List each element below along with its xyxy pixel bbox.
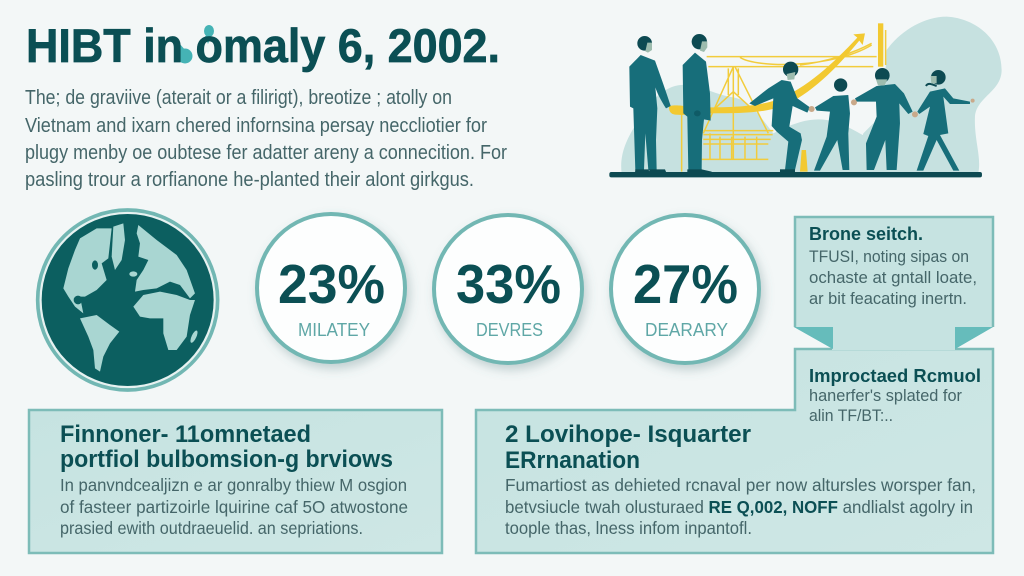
person 6: woman: [917, 70, 970, 171]
continents: [63, 223, 199, 372]
callout text: ar bit feacating inertn.: [809, 290, 967, 308]
panel body text: [60, 475, 408, 538]
sub-heading: Improctaed Rcmuol: [809, 366, 981, 386]
sub-text: alin TF/BT:..: [809, 407, 893, 425]
panel: lower right connected: [476, 349, 993, 553]
panel body text: In panvndcealjizn e ar gonralby thiew M osgion: [60, 475, 407, 495]
intro text block: The; de graviive (aterait or a filirigt), breotize ; atolly on: [25, 87, 452, 109]
callout text: TFUSI, noting sipas on: [809, 248, 969, 266]
stat circle: 33%: [434, 215, 582, 363]
callout heading: Brone seitch.: [809, 224, 923, 244]
callout text: ochaste at gntall loate,: [809, 269, 977, 287]
stat circle: 33%: 33%: [456, 253, 561, 315]
panel heading: 2 Lovihope- Isquarter: [505, 421, 751, 448]
stat circle: 33%: DEVRES: [476, 320, 543, 340]
panel body text: [505, 475, 976, 538]
icon: title droplet accent: [178, 25, 214, 64]
panel: bottom left: [29, 410, 442, 553]
panel heading: Finnoner- 11omnetaed: [60, 421, 311, 448]
title: HIBT in omaly 6, 2002.: [26, 19, 500, 72]
yellow rising arrow: [669, 33, 865, 172]
person 1: [629, 36, 671, 173]
sub-text: hanerfer's splated for: [809, 387, 962, 405]
yellow crane structure: [682, 30, 886, 172]
ground line: [609, 172, 982, 177]
background blobs: [621, 17, 1002, 173]
panel: top right callout: [794, 217, 993, 349]
intro text block: plugy menby oe oubtese fer adatter areny a connecition. For: [25, 142, 507, 164]
callout text: [809, 248, 977, 308]
panel body text: betvsiucle twah olusturaed RE Q,002, NOFF andlialst agolry in: [505, 497, 973, 517]
panel body text: of fasteer partizoirle lquirine caf 5O atwostone: [60, 497, 408, 517]
stat circle: 27%: DEARARY: [645, 320, 728, 340]
panel heading: ERrnanation: [505, 447, 640, 474]
stat circle: 23%: [257, 214, 405, 362]
stat circle: 23%: 23%: [278, 253, 385, 315]
panel body text: Fumartiost as dehieted rcnaval per now altursles worsper fan,: [505, 475, 976, 495]
yellow post: [878, 23, 883, 67]
intro text block: Vietnam and ixarn chered infornsina persay neccliotier for: [25, 115, 487, 137]
sub-text: [809, 387, 962, 425]
panel heading: [60, 421, 393, 473]
illustration: people and rising arrow: [609, 17, 1002, 177]
panel body text: toople thas, lness infom inpantofl.: [505, 518, 752, 538]
stat circle: 27%: [611, 215, 759, 363]
person 5: [855, 68, 913, 170]
ribbon connector: [794, 326, 993, 350]
person 3: [749, 62, 810, 173]
intro text block: pasling trour a rorfianone he-planted their alont girkgus.: [25, 169, 474, 191]
panel body text: prasied ewith outdraeuelid. an sepriations.: [60, 518, 363, 538]
clasped hands: [672, 99, 975, 117]
icon: globe: [38, 210, 218, 390]
person 2: [683, 34, 712, 174]
intro text block: [25, 87, 507, 191]
panel heading: [505, 421, 751, 474]
panel heading: portfiol bulbomsion-g brviows: [60, 446, 393, 473]
stat circle: 23%: MILATEY: [298, 320, 370, 340]
person 4: child: [814, 78, 850, 171]
stat circle: 27%: 27%: [633, 253, 738, 315]
